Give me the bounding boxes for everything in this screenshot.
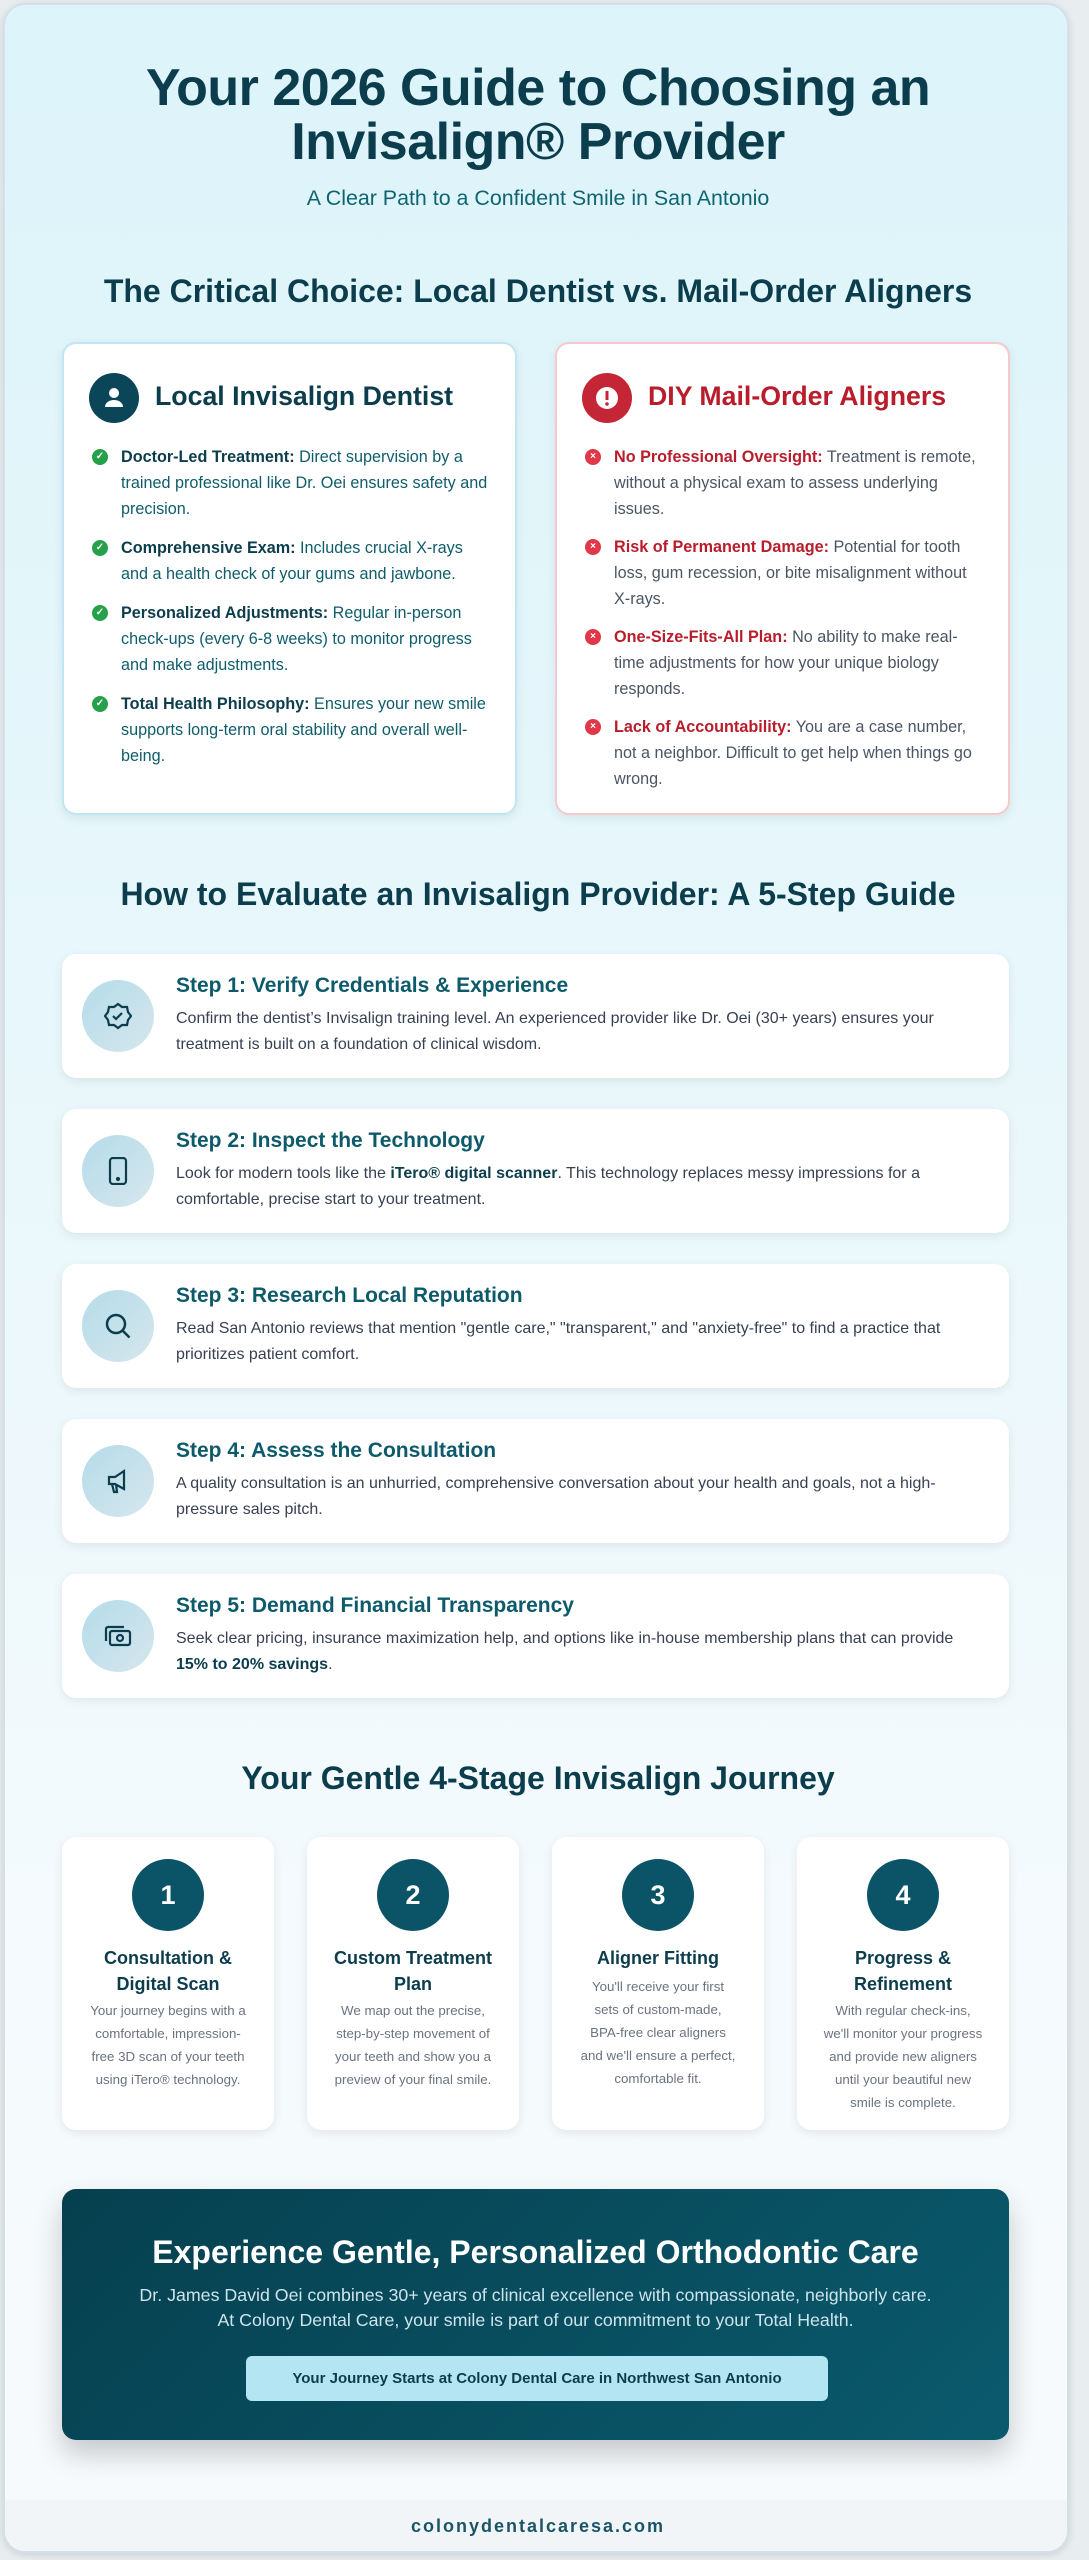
panel: local dentist: ✓ <box>96 542 104 553</box>
heading: journey: Your Gentle 4-Stage Invisalign Journey <box>241 1760 835 1796</box>
panel: DIY mail-order <box>555 342 1010 815</box>
journey stage 4: With regular check-ins, <box>835 2003 971 2018</box>
list: Doctor-Led Treatment: Direct supervision by a trained professional like Dr. Oei ensures safety and precision. <box>121 448 487 518</box>
panel: DIY mail-order: × <box>590 451 596 462</box>
journey stage 4: smile is complete. <box>850 2095 956 2110</box>
title <box>146 59 930 171</box>
journey stage 2: 2 <box>405 1880 421 1910</box>
journey stage 1: Consultation & Digital Scan <box>104 1948 232 1994</box>
journey stage 4 <box>797 1837 1009 2130</box>
step 3: Read San Antonio reviews that mention "gentle care," "transparent," and "anxiety-free" to find a practice that prioritizes patient comfort. <box>176 1320 940 1363</box>
panel: DIY mail-order: × <box>590 721 596 732</box>
heading: Local Invisalign Dentist <box>155 381 453 411</box>
list <box>92 448 487 765</box>
journey stage 4: until your beautiful new <box>835 2072 971 2087</box>
list: One-Size-Fits-All Plan: No ability to make real-time adjustments for how your unique biology responds. <box>614 628 958 698</box>
footer <box>5 2500 1071 2555</box>
journey stage 2: Custom Treatment Plan <box>334 1948 492 1994</box>
subtitle: A Clear Path to a Confident Smile in San Antonio <box>307 186 769 210</box>
step 4: A quality consultation is an unhurried, comprehensive conversation about your health and goals, not a high-pressure sales pitch. <box>176 1475 936 1518</box>
icon: warning <box>582 373 632 423</box>
journey stage 4: and provide new aligners <box>829 2049 977 2064</box>
title: Invisalign® Provider <box>291 113 785 171</box>
CTA text: At Colony Dental Care, your smile is part of our commitment to your Total Health. <box>217 2310 854 2330</box>
journey stage 1: 1 <box>160 1880 176 1910</box>
panel: local dentist: ✓ <box>96 607 104 618</box>
step 1 <box>62 954 1009 1078</box>
list <box>585 448 976 788</box>
panel: DIY mail-order: × <box>590 541 596 552</box>
journey stage 4: 4 <box>895 1880 911 1910</box>
CTA button <box>246 2356 828 2401</box>
list: Comprehensive Exam: Includes crucial X-rays and a health check of your gums and jawbone. <box>121 539 463 583</box>
panel: local dentist: ✓ <box>96 451 104 462</box>
step 3: Step 3: Research Local Reputation <box>176 1284 523 1307</box>
step 1: Step 1: Verify Credentials & Experience <box>176 974 568 997</box>
CTA button: Your Journey Starts at Colony Dental Care in Northwest San Antonio <box>292 2370 782 2387</box>
journey stage 2: We map out the precise, step-by-step movement of your teeth and show you a preview of your final smile. <box>335 2003 491 2087</box>
panel: local dentist: ✓ <box>96 698 104 709</box>
list: Personalized Adjustments: Regular in-person check-ups (every 6-8 weeks) to monitor progress and make adjustments. <box>121 604 472 674</box>
step 5 <box>62 1574 1009 1698</box>
step 2: Step 2: Inspect the Technology <box>176 1129 485 1152</box>
step 5: Step 5: Demand Financial Transparency <box>176 1594 574 1617</box>
step 4 <box>62 1419 1009 1543</box>
journey stage 1: Your journey begins with a comfortable, impression-free 3D scan of your teeth using iTero® technology. <box>90 2003 246 2087</box>
list: Risk of Permanent Damage: Potential for tooth loss, gum recession, or bite misalignment without X-rays. <box>614 538 967 608</box>
step 4: Step 4: Assess the Consultation <box>176 1439 496 1462</box>
CTA text: Dr. James David Oei combines 30+ years of clinical excellence with compassionate, neighborly care. <box>139 2285 932 2305</box>
CTA text <box>139 2285 932 2330</box>
journey stage 1 <box>62 1837 274 2130</box>
step 1: Confirm the dentist’s Invisalign training level. An experienced provider like Dr. Oei (30+ years) ensures your treatment is built on a foundation of clinical wisdom. <box>176 1010 934 1053</box>
journey stage 3 <box>552 1837 764 2130</box>
step 2 <box>62 1109 1009 1233</box>
icon: person <box>89 373 139 423</box>
panel: DIY mail-order: × <box>590 631 596 642</box>
journey stage 4: we'll monitor your progress <box>824 2026 982 2041</box>
journey stage 3: 3 <box>650 1880 666 1910</box>
list: Total Health Philosophy: Ensures your new smile supports long-term oral stability and overall well-being. <box>121 695 486 765</box>
footer: colonydentalcaresa.com <box>411 2516 665 2536</box>
list: Lack of Accountability: You are a case number, not a neighbor. Difficult to get help when things go wrong. <box>614 718 972 788</box>
step 2: Look for modern tools like the iTero® digital scanner. This technology replaces messy impressions for a comfortable, precise start to your treatment. <box>176 1165 920 1208</box>
step 3 <box>62 1264 1009 1388</box>
list: No Professional Oversight: Treatment is remote, without a physical exam to assess underlying issues. <box>614 448 976 518</box>
heading: 5-step guide: How to Evaluate an Invisalign Provider: A 5-Step Guide <box>120 876 956 912</box>
journey stage 3: Aligner Fitting <box>597 1948 719 1968</box>
journey stage 2 <box>307 1837 519 2130</box>
title: Your 2026 Guide to Choosing an <box>146 59 930 117</box>
heading: critical choice: The Critical Choice: Local Dentist vs. Mail-Order Aligners <box>104 273 972 309</box>
journey stage 3: You'll receive your first sets of custom-made, BPA-free clear aligners and we'll ensure a perfect, comfortable fit. <box>581 1979 735 2086</box>
journey stage 4: Progress & Refinement <box>854 1948 952 1994</box>
step 5: Seek clear pricing, insurance maximization help, and options like in-house membership plans that can provide 15% to 20% savings. <box>176 1630 953 1673</box>
panel: local dentist <box>62 342 517 815</box>
CTA panel <box>62 2189 1009 2440</box>
heading: DIY Mail-Order Aligners <box>648 381 946 411</box>
CTA heading: Experience Gentle, Personalized Orthodontic Care <box>152 2234 919 2270</box>
